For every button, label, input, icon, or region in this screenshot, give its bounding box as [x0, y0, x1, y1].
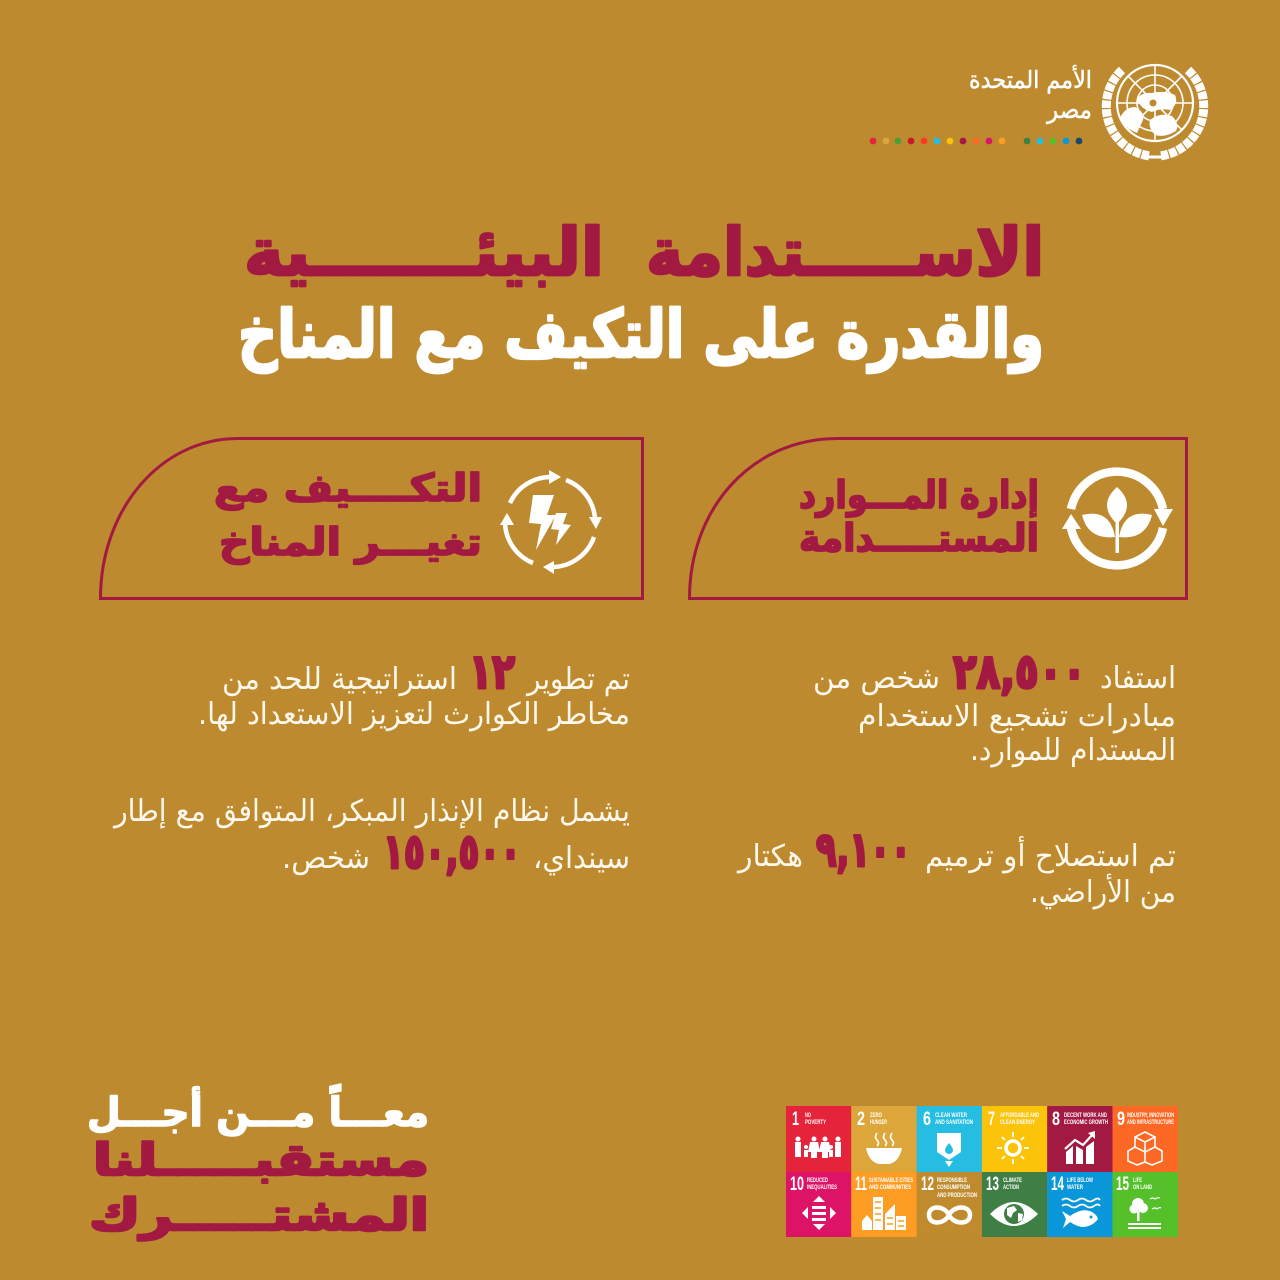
- logo text: United Nations Egypt: مصر: [1045, 95, 1092, 124]
- tile: SDG 15: ON LAND: [1133, 1184, 1152, 1191]
- tile: SDG 14: 14: [1051, 1174, 1064, 1195]
- tile: SDG 12: RESPONSIBLE: [937, 1177, 967, 1184]
- tile: SDG 1: 1: [792, 1109, 799, 1130]
- heading: climate change adaptation: التكــــيف مع: [214, 466, 482, 510]
- tile: SDG 8: [1047, 1106, 1112, 1172]
- stat: 12 strategies: استراتيجية للحد من: [222, 662, 457, 697]
- tile: SDG 11: 11: [855, 1174, 867, 1195]
- header: UN Egypt logo block: [870, 65, 1204, 157]
- heading: climate change adaptation: تغيـــر المناخ: [219, 520, 482, 564]
- icon: UN emblem: [1106, 65, 1204, 157]
- tile: SDG 2: [851, 1106, 917, 1172]
- logo text: United Nations Egypt: الأمم المتحدة: [969, 65, 1092, 94]
- logo text: United Nations Egypt: [969, 65, 1092, 124]
- title: [238, 214, 1044, 374]
- stat: 9,100 hectares: هكتار: [736, 839, 803, 874]
- icon: lightning in cycle arrows: [500, 470, 602, 574]
- stat: 150,500 people early warning: يشمل نظام الإنذار المبكر، المتوافق مع إطار: [112, 794, 630, 829]
- stat: 9,100 hectares: ٩,١٠٠: [816, 822, 911, 878]
- heading: sustainable resource management: [799, 473, 1039, 560]
- tile: SDG 8: 8: [1052, 1109, 1060, 1130]
- box outline: [690, 438, 1186, 598]
- tile: SDG 11: SUSTAINABLE CITIES: [869, 1177, 913, 1184]
- tile: SDG 6: [917, 1106, 982, 1172]
- tile: SDG 9: 9: [1117, 1109, 1125, 1130]
- tile: SDG 12: 12: [921, 1174, 934, 1195]
- stat: 150,500 people early warning: [112, 794, 630, 880]
- tile: SDG 7: CLEAN ENERGY: [1000, 1119, 1035, 1126]
- tile: SDG 14: [1047, 1172, 1112, 1237]
- heading: climate change adaptation: [214, 466, 482, 564]
- tile: SDG 11: AND COMMUNITIES: [869, 1184, 911, 1191]
- slogan: together for our common future: المشتـــــرك: [89, 1190, 429, 1241]
- stat: 28,500 people: [813, 644, 1176, 768]
- stat: 150,500 people early warning: سينداي،: [533, 841, 630, 876]
- tile: SDG 12: AND PRODUCTION: [937, 1192, 977, 1199]
- stat: 150,500 people early warning: شخص.: [282, 841, 370, 876]
- stat: 12 strategies: [198, 644, 630, 732]
- tile: SDG 12: CONSUMPTION: [937, 1184, 970, 1191]
- tile: SDG 8: ECONOMIC GROWTH: [1064, 1119, 1108, 1126]
- tile: SDG 10: 10: [790, 1174, 804, 1195]
- title line 2: climate resilience: والقدرة على التكيف مع المناخ: [238, 296, 1044, 374]
- stat: 9,100 hectares: من الأراضي.: [1030, 872, 1176, 910]
- tile: SDG 7: AFFORDABLE AND: [1000, 1112, 1039, 1119]
- stat: 12 strategies: ١٢: [469, 644, 515, 700]
- stat: 28,500 people: استفاد: [1100, 661, 1176, 696]
- tile: SDG 2: HUNGER: [870, 1119, 887, 1126]
- tile: SDG 7: [982, 1106, 1047, 1172]
- title line 1: environmental sustainability: [244, 214, 1044, 291]
- stat: 28,500 people: مبادرات تشجيع الاستخدام: [858, 699, 1176, 734]
- tile: SDG 14: LIFE BELOW: [1067, 1177, 1094, 1184]
- tile: SDG 10: INEQUALITIES: [807, 1184, 837, 1191]
- tile: SDG 1: POVERTY: [805, 1119, 826, 1126]
- tile: SDG 6: 6: [923, 1109, 931, 1130]
- tile: SDG 6: CLEAN WATER: [935, 1112, 967, 1119]
- text block: climate adaptation statistics: [112, 644, 630, 880]
- tile: SDG 10: [786, 1172, 851, 1237]
- SDG colour dots: [870, 138, 1082, 144]
- slogan: together for our common future: معـــاً مـــن أجـــل: [87, 1083, 429, 1136]
- slogan: together for our common future: [87, 1083, 429, 1241]
- stat: 9,100 hectares: [736, 822, 1176, 910]
- icon: plant in recycling arrows: [1062, 472, 1173, 565]
- SDG tiles grid: [786, 1106, 1178, 1237]
- tile: SDG 13: 13: [986, 1174, 999, 1195]
- tile: SDG 13: CLIMATE: [1003, 1177, 1022, 1184]
- tile: SDG 9: AND INFRASTRUCTURE: [1127, 1119, 1174, 1126]
- tile: SDG 2: ZERO: [870, 1112, 882, 1119]
- tile: SDG 6: AND SANITATION: [935, 1119, 973, 1126]
- stat: 9,100 hectares: تم استصلاح أو ترميم: [925, 835, 1176, 874]
- title line 1: environmental sustainability: الاســـــتدامة: [646, 214, 1044, 291]
- tile: SDG 2: 2: [857, 1109, 865, 1130]
- stat: 28,500 people: المستدام للموارد.: [970, 733, 1176, 768]
- tile: SDG 9: INDUSTRY, INNOVATION: [1127, 1112, 1174, 1119]
- tile: SDG 13: [982, 1172, 1047, 1237]
- stat: 12 strategies: مخاطر الكوارث لتعزيز الاستعداد لها.: [198, 697, 630, 732]
- tile: SDG 10: REDUCED: [807, 1177, 828, 1184]
- stat: 28,500 people: شخص من: [813, 661, 940, 696]
- box outline: [100, 438, 642, 598]
- heading: sustainable resource management: المستـــــدامة: [799, 516, 1039, 560]
- stat: 150,500 people early warning: ١٥٠,٥٠٠: [383, 824, 521, 880]
- stat: 12 strategies: تم تطوير: [525, 662, 630, 697]
- tile: SDG 12: [917, 1172, 982, 1237]
- tile: SDG 1: NO: [805, 1112, 811, 1119]
- tile: SDG 1: [786, 1106, 851, 1172]
- tile: SDG 7: 7: [988, 1109, 995, 1130]
- text block: resource management statistics: [736, 644, 1176, 910]
- tile: SDG 15: [1112, 1172, 1178, 1237]
- tile: SDG 14: WATER: [1067, 1184, 1083, 1191]
- tile: SDG 15: LIFE: [1133, 1177, 1142, 1184]
- heading: sustainable resource management: إدارة المـــوارد: [799, 473, 1039, 518]
- tile: SDG 13: ACTION: [1003, 1184, 1019, 1191]
- tile: SDG 9: [1112, 1106, 1178, 1172]
- tile: SDG 15: 15: [1116, 1174, 1129, 1195]
- tile: SDG 11: [851, 1172, 917, 1237]
- panel: sustainable resource management header: [690, 438, 1186, 598]
- title line 1: environmental sustainability: البيئـــــــية: [244, 214, 604, 291]
- stat: 28,500 people: ٢٨,٥٠٠: [953, 644, 1086, 700]
- tile: SDG 8: DECENT WORK AND: [1064, 1112, 1107, 1119]
- slogan: together for our common future: مستقبـــــلنا: [93, 1135, 429, 1186]
- panel: climate change adaptation header: [100, 438, 642, 598]
